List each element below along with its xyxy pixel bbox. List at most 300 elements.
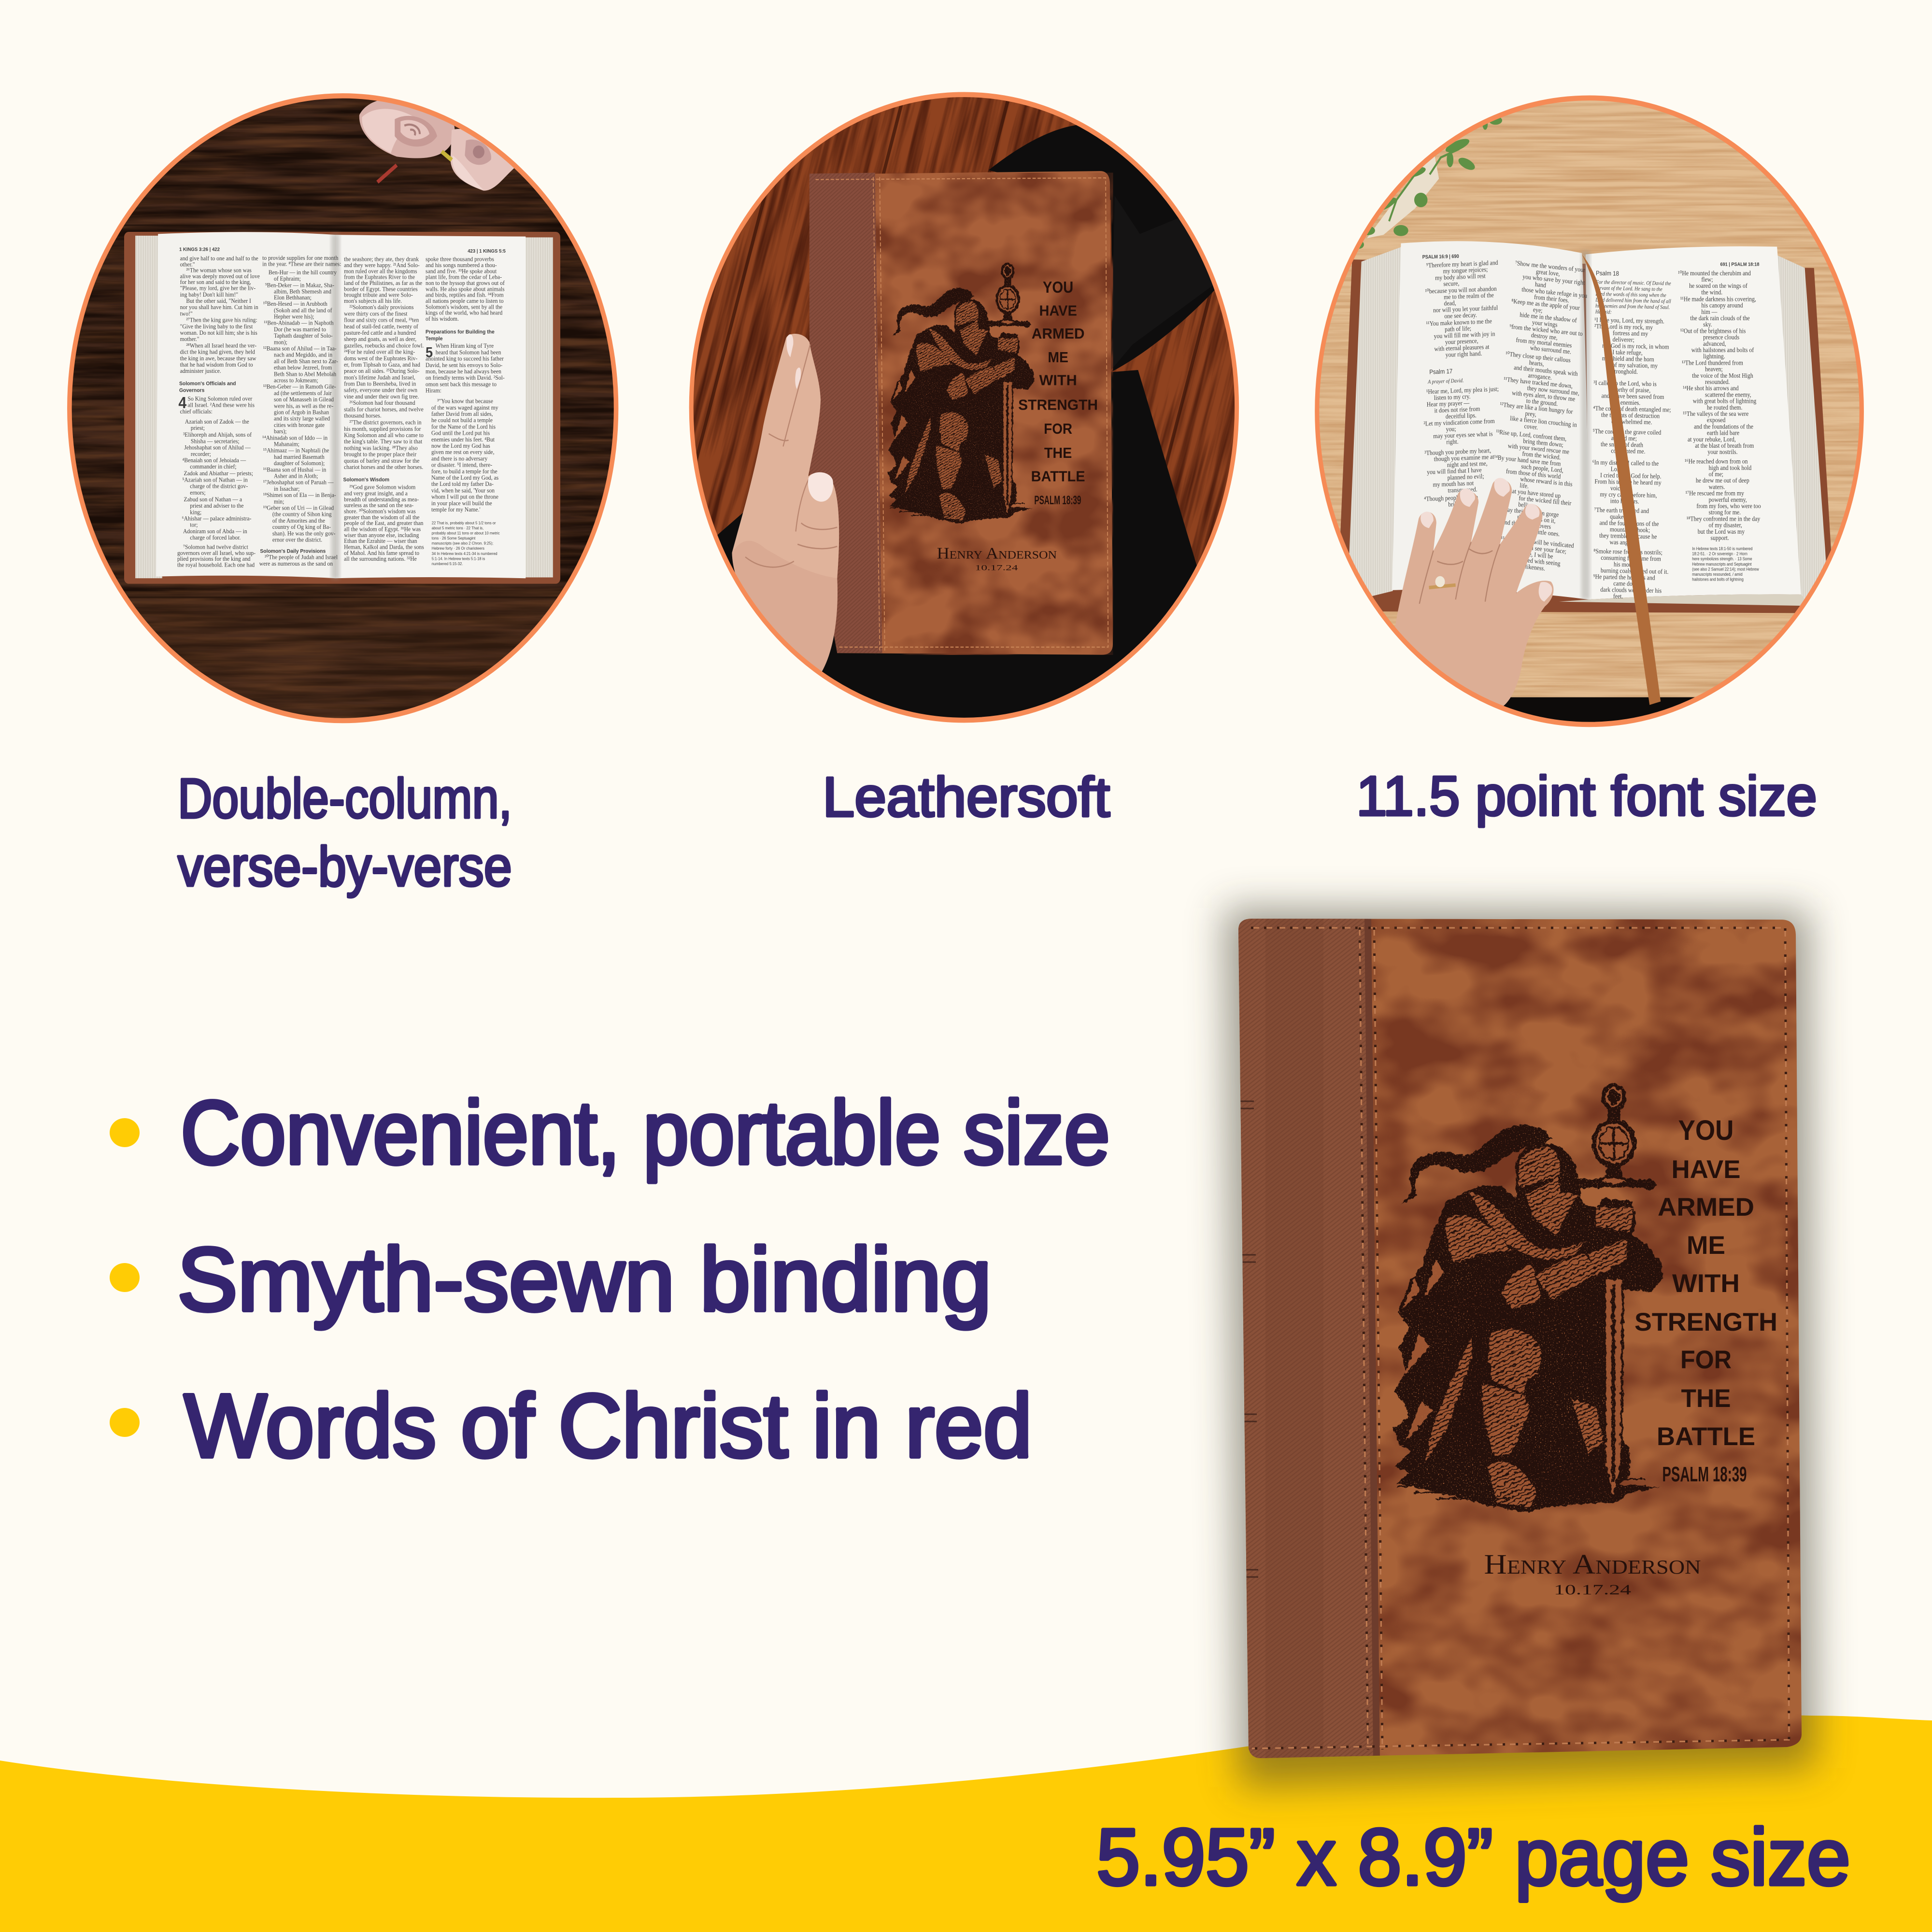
verse column three: my enemies. (1612, 398, 1640, 406)
verse column two: life. (1520, 482, 1529, 490)
verse column two: ¹⁹Geber son of Uri — in Gilead (263, 504, 334, 511)
verse column one: ⁷Solomon had twelve district (183, 543, 248, 551)
verse column four: earth laid bare (1707, 429, 1740, 437)
verse column two: ernor over the district. (272, 536, 322, 543)
verse column two: and will see your face; (1515, 543, 1567, 555)
bullet list (110, 1083, 1110, 1476)
verse column four: anointed king to succeed his father (426, 355, 504, 362)
verse column two: from my mortal enemies (1516, 336, 1572, 349)
engraved verse small: PSALM 18:39 (1034, 493, 1081, 507)
verse column three: brought tribute and were Solo- (344, 291, 413, 298)
verse column one: "Give the living baby to the first (180, 323, 253, 330)
verse column four: him — (1701, 308, 1718, 315)
verse column one: alive was deeply moved out of love (180, 272, 260, 280)
verse column three: er, from Tiphsah to Gaza, and had (344, 361, 420, 368)
engraved verse: FOR (1680, 1346, 1732, 1374)
verse column one: plied provisions for the king and (177, 555, 250, 562)
verse column one: priest; (191, 425, 205, 431)
grey object right edge (1823, 242, 1859, 294)
verse column one: Zadok and Abiathar — priests; (184, 470, 253, 477)
verse column four: for the Name of the Lord his (431, 423, 496, 430)
verse column three: vine and under their own fig tree. (344, 393, 419, 400)
verse column one: But the other said, "Neither I (186, 297, 251, 304)
verse column four: but the Lord was my (1698, 528, 1745, 535)
running heads: PSALM 16:9 | 690 (1422, 254, 1459, 260)
verse column three: overwhelmed me. (1611, 418, 1652, 426)
verse column three: ⁶In my distress I called to the (1592, 459, 1659, 467)
verse column two: bring them down; (1523, 437, 1563, 449)
footnotes: 18:2-51. · 2 Or sovereign · 2 Horn (1692, 552, 1747, 556)
verse column two: gion of Argob in Bashan (274, 409, 329, 416)
verse column four: and there is no adversary (431, 455, 488, 462)
verse column three: ⁵The cords of the grave coiled (1593, 427, 1662, 436)
verse column two: Mahanaim; (274, 440, 299, 448)
verse column four: and the foundations of the (1694, 423, 1753, 430)
verse column two: they now surround me, (1527, 384, 1579, 397)
verse column one: Governors (179, 387, 204, 394)
verse column three: ²²Solomon's daily provisions (349, 304, 414, 311)
running heads: 423 | 1 KINGS 5:5 (468, 249, 506, 254)
trouser fold (1111, 196, 1219, 370)
verse column four: sky. (1703, 321, 1712, 328)
verse column four: ¹²Out of the brightness of his (1680, 327, 1746, 335)
verse column four: the Lord told my father Da- (431, 481, 494, 487)
verse column four: enemies under his feet. ⁴But (431, 436, 495, 443)
verse column three: quaked, (1610, 513, 1628, 521)
verse column three: they trembled because he (1599, 532, 1657, 540)
verse column three: sureless as the sand on the sea- (344, 502, 413, 509)
verse column two: bars); (274, 428, 287, 435)
verse column three: voice; (1610, 484, 1624, 492)
verse column one: charge of the district gov- (190, 483, 248, 490)
caption: page size: 5.95” x 8.9” page size (1096, 1813, 1850, 1902)
verse column three: pasture-fed cattle and a hundred (344, 329, 416, 336)
verse column three: flour and sixty cors of meal, ²³ten (344, 316, 419, 324)
verse column four: of his wisdom. (426, 315, 459, 322)
verse column three: his enemies and from the hand of Saul. (1595, 303, 1670, 311)
footnotes: probably about 11 tons or about 10 metric (432, 531, 500, 536)
verse column four: walls. He also spoke about animals (426, 285, 505, 292)
verse column one: though you examine me at (1434, 453, 1494, 463)
verse column two: were as numerous as the sand on (259, 560, 333, 567)
verse column two: ¹⁷Jehoshaphat son of Paruah — (263, 479, 334, 486)
panel: leathersoft cover held in hand (467, 0, 1457, 1007)
spine shading (1265, 918, 1323, 1763)
caption: double-column (178, 767, 512, 898)
verse column one: the king in awe, because they saw (180, 355, 256, 362)
verse column four: God until the Lord put his (431, 429, 490, 437)
verse column three: stalls for chariot horses, and twelve (344, 406, 424, 413)
verse column four: Hiram: (426, 387, 441, 394)
verse column three: greater than the wisdom of all the (344, 513, 420, 521)
verse column three: was angry. (1609, 539, 1634, 546)
verse column two: such people, Lord, (1521, 463, 1563, 474)
verse column three: and very great insight, and a (344, 490, 408, 497)
verse column four: on friendly terms with David. ²Sol- (426, 374, 505, 381)
glass vase and greenery (1354, 116, 1502, 249)
verse column four: the dark rain clouds of the (1690, 314, 1750, 322)
verse column two: ¹⁰Ben-Hesed — in Arubboth (263, 300, 327, 307)
verse column three: I cried to my God for help. (1600, 471, 1662, 480)
verse column one: ¹Hear me, Lord, my plea is just; (1426, 385, 1499, 396)
verse column two: ¹¹Ben-Abinadab — in Naphoth (264, 319, 334, 327)
verse column three: mon ruled over all the kingdoms (344, 268, 417, 275)
verse column four: Name of the Lord my God, as (431, 474, 498, 481)
verse column four: he soared on the wings of (1689, 282, 1747, 289)
verse column one: ¹⁰because you will not abandon (1425, 285, 1497, 295)
icon: hand (732, 334, 839, 676)
right page (336, 235, 526, 578)
verse column one: ²⁶The woman whose son was (186, 267, 252, 274)
verse column three: and I have been saved from (1601, 392, 1664, 400)
verse column four: of the wars waged against my (431, 404, 498, 411)
verse column one: priest and adviser to the (190, 502, 244, 509)
verse column four: David, he sent his envoys to Solo- (426, 361, 502, 369)
verse column one: king; (190, 509, 201, 515)
engraved verse: ME (1687, 1231, 1725, 1260)
verse column three: ⁹He parted the heavens and (1593, 573, 1655, 582)
verse column three: chariot horses and the other horses. (344, 464, 423, 470)
verse column four: the voice of the Most High (1692, 372, 1753, 379)
verse column four: lightning. (1703, 353, 1725, 360)
verse column two: Dor (he was married to (274, 326, 326, 333)
verse column one: one see decay. (1444, 312, 1477, 320)
verse column three: mon's lifetime Judah and Israel, (344, 374, 415, 381)
verse column four: omon sent back this message to (426, 381, 497, 388)
verse column three: ³I called to the Lord, who is (1593, 379, 1657, 388)
engraved verse small: HAVE (1039, 302, 1077, 319)
right page block (524, 237, 553, 577)
engraved verse: PSALM 18:39 (1662, 1463, 1747, 1486)
engraved verse: THE (1681, 1384, 1731, 1413)
verse column four: Preparations for Building the (426, 329, 495, 335)
verse column two: mon); (274, 339, 287, 345)
verse column four: ³"You know that because (437, 398, 493, 405)
verse column three: into his ears. (1610, 497, 1639, 505)
verse column three: around me; (1611, 434, 1637, 442)
verse column two: ethan below Jezreel, from (274, 364, 332, 371)
verse column one: and give half to one and half to the (180, 255, 258, 262)
verse column four: with hailstones and bolts of (1691, 346, 1754, 354)
verse column one: planned no evil; (1447, 473, 1484, 481)
engraved verse: HAVE (1671, 1155, 1741, 1184)
cover stitching (816, 177, 1108, 651)
verse column two: may their children gorge (1503, 506, 1559, 518)
verse column four: all nations people came to listen to (426, 297, 504, 304)
caption: font size: 11.5 point font size (1356, 765, 1817, 827)
orange ring (70, 96, 616, 721)
verse column one: other." (180, 261, 195, 268)
verse column three: the seashore; they ate, they drank (344, 256, 419, 263)
verse column three: head of stall-fed cattle, twenty of (344, 323, 419, 330)
engraved verse small: THE (1044, 445, 1072, 462)
verse column four: ¹³The Lord thundered from (1682, 359, 1743, 367)
icon: hand on page (1394, 478, 1554, 708)
drop cap four: 4 (178, 394, 186, 412)
verse column two: those who take refuge in you (1521, 285, 1588, 299)
footnotes: about 5 metric tons · 22 That is, (432, 526, 483, 530)
caption: double-column: verse-by-verse (178, 835, 512, 898)
verse column two: country of Og king of Ba- (272, 524, 331, 530)
verse column two: your likeness. (1513, 562, 1546, 572)
verse column two: ¹⁶Baana son of Hushai — in (263, 466, 326, 473)
verse column two: hearts, (1529, 359, 1544, 368)
footnotes: 34 In Hebrew texts 4:21-34 is numbered (432, 551, 497, 556)
engraved name small: Henry Anderson (937, 544, 1057, 562)
verse column three: his month, supplied provisions for (344, 425, 421, 432)
verse column three: breadth of understanding as mea- (344, 496, 419, 503)
verse column two: with your sword rescue me (1507, 442, 1570, 455)
verse column two: ¹⁵Ahimaaz — in Naphtali (he (263, 447, 329, 454)
verse column one: mother." (180, 336, 199, 342)
verse column two: destroy me, (1531, 331, 1558, 341)
verse column one: listen to my cry. (1434, 393, 1471, 401)
verse column four: the wind. (1701, 289, 1722, 296)
drop cap five: 5 (426, 344, 433, 361)
verse column three: deliverer; (1613, 336, 1634, 343)
verse column two: ¹⁵As for me, I will be vindicated (1501, 535, 1575, 550)
verse column two: whose reward is in this (1520, 475, 1573, 488)
verse column three: ²⁴For he ruled over all the king- (344, 348, 415, 355)
verse column four: ¹⁴He shot his arrows and (1683, 384, 1739, 392)
verse column two: min; (274, 498, 284, 505)
right page (1586, 246, 1801, 599)
verse column two: and there be leftovers (1502, 518, 1551, 530)
verse column four: in your place will build the (431, 499, 492, 507)
engraved date: 10.17.24 (1554, 1582, 1631, 1598)
verse column three: his mouth, (1614, 561, 1638, 568)
verse column one: A prayer of David. (1427, 378, 1464, 385)
verse column two: (Sokoh and all the land of (274, 307, 332, 313)
engraved date small: 10.17.24 (975, 564, 1019, 572)
engraved verse small: FOR (1044, 421, 1072, 438)
verse column one: Azariah son of Zadok — the (185, 418, 249, 425)
fabric spine (810, 173, 882, 653)
caption: leathersoft: Leathersoft (823, 766, 1110, 828)
verse column one: my body also will rest (1435, 272, 1486, 282)
verse column four: ¹⁸They confronted me in the day (1687, 515, 1761, 523)
bullet: smyth-sewn: Smyth-sewn binding (177, 1230, 992, 1330)
verse column two: ²⁰The people of Judah and Israel (265, 554, 338, 561)
verse column one: all Israel. ²And these were his (188, 401, 255, 409)
engraved verse: ARMED (1658, 1193, 1754, 1222)
verse column one: your right hand. (1446, 350, 1482, 358)
verse column two: nach and Megiddo, and in (274, 351, 332, 358)
panel: open bible on dark wood (67, 93, 618, 724)
verse column four: fore, to build a temple for the (431, 468, 497, 475)
verse column two: you who save by your right (1522, 273, 1585, 286)
verse column four: vid, when he said, 'Your son (431, 487, 495, 494)
engraved verse small: WITH (1039, 372, 1077, 389)
verse column three: mon's subjects all his life. (344, 297, 402, 304)
verse column three: ²⁹God gave Solomon wisdom (349, 483, 416, 491)
running heads (179, 247, 506, 254)
verse column one: two!" (180, 310, 193, 317)
verse column three: the torrents of destruction (1601, 411, 1660, 420)
verse column three: Heman, Kalkol and Darda, the sons (344, 543, 424, 551)
running heads (1422, 254, 1760, 268)
verse column one: me to the realm of the (1444, 291, 1494, 301)
verse column four: ¹⁷He rescued me from my (1685, 490, 1744, 497)
verse column three: brought to the proper place their (344, 451, 416, 458)
verse column three: Solomon's Wisdom (343, 477, 389, 483)
page bottom edges (1559, 594, 1810, 606)
verse column four: at the blast of breath from (1695, 442, 1754, 449)
running heads: 1 KINGS 3:26 | 422 (179, 247, 220, 253)
verse column two: of the Amorites and the (272, 517, 326, 524)
verse column one: you will fill me with joy in (1434, 330, 1495, 340)
left page (156, 232, 336, 578)
verse column four: he routed them. (1707, 404, 1742, 411)
verse column four: mon, because he had always been (426, 368, 501, 375)
verse column two: son of Manasseh in Gilead (274, 396, 334, 403)
footnotes: here symbolizes strength. · 13 Some (1692, 557, 1752, 561)
verse column three: shore. ³⁰Solomon's wisdom was (344, 508, 416, 515)
verse column four: When Hiram king of Tyre (436, 342, 494, 349)
footnotes: numbered 5:15-32. (432, 562, 463, 566)
panel: open bible with hand on oak table (1304, 72, 1884, 739)
verse column two: all of Beth Shan next to Zar- (274, 357, 338, 365)
verse column four: sand and five. ³³He spoke about (426, 268, 497, 275)
verse column two: prey, (1525, 410, 1536, 418)
verse column two: ¹⁰They close up their callous (1506, 350, 1571, 364)
footnotes: manuscripts resounded, / amid (1692, 572, 1743, 577)
verse column two: Elon Bethhanan; (274, 294, 312, 301)
verse column three: and the foundations of the (1599, 519, 1659, 527)
verse column two: from those of this world (1506, 468, 1561, 480)
verse column one: ³Though you probe my heart, (1424, 447, 1491, 457)
verse column four: advanced, (1703, 340, 1726, 347)
verse column one: ⁴Benaiah son of Jehoiada — (182, 456, 246, 464)
orange ring (691, 95, 1237, 720)
verse column two: ¹⁴By your hand save me from (1494, 454, 1561, 468)
verse column one: ¹¹You make known to me the (1426, 317, 1492, 327)
verse column four: waters. (1709, 483, 1725, 491)
verse column two: ⁷Show me the wonders of your (1515, 259, 1586, 274)
verse column three: I take refuge, (1612, 349, 1643, 356)
verse column two: in Issachar; (274, 485, 299, 492)
verse column two: with eyes alert, to throw me (1512, 389, 1576, 403)
engraved verse small: ARMED (1032, 326, 1084, 342)
verse column three: all the wisdom of Egypt. ³¹He was (344, 526, 421, 533)
verse column four: Temple (426, 336, 443, 342)
verse column four: at your rebuke, Lord, (1688, 436, 1736, 443)
verse column two: your wings (1532, 319, 1558, 328)
verse column three: dark clouds were under his (1600, 586, 1662, 595)
verse column one: the royal household. Each one had (177, 561, 255, 568)
verse column two: Taphath daughter of Solo- (274, 332, 333, 339)
engraved verse small: YOU (1043, 278, 1073, 296)
verse column one: nor will you let your faithful (1433, 304, 1498, 314)
left page (1392, 241, 1589, 599)
footnotes: 5:1-14. In Hebrew texts 5:1-18 is (432, 556, 485, 561)
verse column one: Psalm 17 (1429, 368, 1453, 376)
left page block (1349, 247, 1402, 597)
verse column two: like a fierce lion crouching in (1510, 414, 1577, 428)
verse column four: strong for me. (1709, 509, 1741, 516)
verse column three: my shield and the horn (1602, 355, 1654, 363)
verse column four: given me rest on every side, (431, 449, 494, 455)
verse column one: my tongue rejoices; (1443, 266, 1488, 275)
verse column three: all the surrounding nations. ³²He (344, 555, 417, 562)
verse column four: ¹¹He made darkness his covering, (1680, 296, 1756, 303)
verse column one: may your eyes see what is (1433, 430, 1493, 440)
verse column one: ³Elihoreph and Ahijah, sons of (183, 431, 252, 438)
spine marks (1239, 1101, 1258, 1577)
engraved name: Henry Anderson (1484, 1548, 1701, 1580)
verse column two: daughter of Solomon); (274, 460, 325, 467)
verse column three: Ethan the Ezrahite — wiser than (344, 538, 417, 544)
verse column one: path of life; (1445, 325, 1471, 333)
verse column three: the snares of death (1601, 440, 1644, 449)
verse column three: my cry came before him, (1600, 491, 1657, 499)
verse column one: deceitful lips. (1446, 412, 1477, 420)
engraved verse: STRENGTH (1634, 1308, 1777, 1336)
verse column two: hand (1535, 281, 1547, 289)
verse column four: temple for my Name.' (431, 506, 481, 513)
stitching dark (1251, 927, 1789, 1749)
ribbon bookmark (1582, 255, 1661, 705)
verse column one: your presence, (1445, 337, 1478, 346)
verse column two: and its sixty large walled (274, 415, 330, 422)
verse column three: thousand horses. (344, 412, 382, 419)
verse column four: your nostrils. (1707, 448, 1738, 455)
verse column four: or disaster. ⁵I intend, there- (431, 461, 492, 469)
verse column three: For the director of music. Of David the (1595, 279, 1671, 287)
verse column two: cover. (1524, 423, 1538, 431)
verse column one: administer justice. (180, 368, 221, 374)
yellow wave band (0, 1715, 1932, 1932)
verse column one: ⁶Ahishar — palace administra- (182, 515, 251, 522)
verse column two: for the wicked fill their (1519, 495, 1572, 507)
verse column two: bellies; (1518, 501, 1535, 510)
verse column one: Jehoshaphat son of Ahilud — (184, 444, 251, 451)
verse column one: tor; (190, 521, 198, 528)
verse column three: ²⁷The district governors, each in (349, 419, 422, 426)
verse column three: came down; (1613, 580, 1641, 587)
footnotes: tons · 26 Some Septuagint (432, 536, 476, 540)
footnotes: In Hebrew texts 18:1-50 is numbered (1692, 547, 1753, 551)
verse column two: across to Jokmeam; (274, 377, 318, 384)
verse column one: ²Let my vindication come from (1423, 417, 1495, 427)
gutter shadow (331, 234, 340, 579)
verse column three: safety, everyone under their own (344, 386, 417, 394)
verse column three: King Solomon and all who came to (344, 432, 424, 439)
verse column two: eye; (1533, 306, 1543, 314)
verse column two: ¹³Rise up, Lord, confront them, (1496, 428, 1567, 442)
verse column four: of my disaster, (1709, 522, 1742, 529)
verse column three: wiser than anyone else, including (344, 531, 419, 539)
verse column four: exposed (1707, 416, 1726, 424)
bullet: portable size: Convenient, portable size (181, 1083, 1110, 1183)
verse column four: spoke three thousand proverbs (426, 256, 494, 263)
verse column four: powerful enemy, (1709, 496, 1747, 503)
footnotes: 22 That is, probably about 5 1/2 tons or (432, 521, 496, 526)
verse column one: bribe me, (1448, 500, 1470, 508)
verse column three: land of the Philistines, as far as the (344, 279, 423, 286)
verse column four: he could not build a temple (431, 417, 493, 424)
verse column three: confronted me. (1611, 447, 1646, 455)
verse column four: scattered the enemy, (1705, 391, 1751, 398)
engraved verse: BATTLE (1657, 1422, 1755, 1451)
verse column three: servant of the Lord. He sang to the (1596, 285, 1662, 293)
fabric spine (1232, 913, 1377, 1763)
verse column two: cities with bronze gate (274, 421, 325, 428)
orange ring (1317, 98, 1861, 724)
verse column two: from the wicked. (1522, 450, 1561, 461)
icon: pink roses (359, 100, 514, 191)
verse column one: you; (1446, 425, 1456, 433)
